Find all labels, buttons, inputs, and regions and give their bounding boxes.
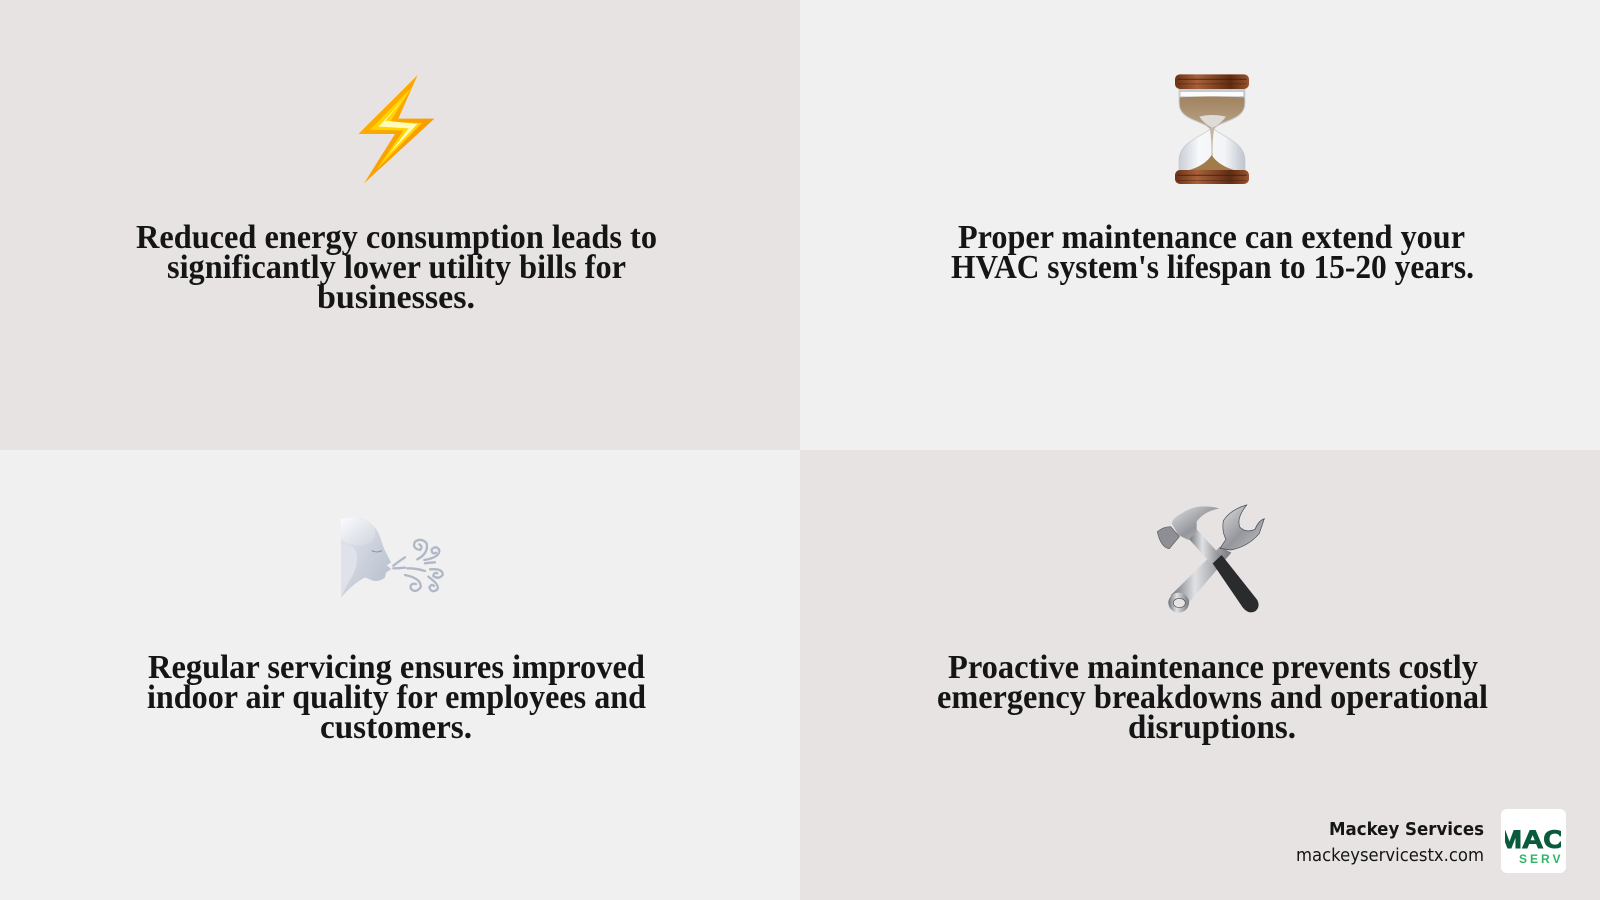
- icon: hourglass: [1175, 74, 1249, 184]
- logo: Mackey Services badge: [1501, 809, 1566, 873]
- heading: air quality text: Regular servicing ensures improved: [148, 649, 645, 686]
- heading: breakdown prevention text: emergency breakdowns and operational: [937, 679, 1488, 716]
- heading: energy savings text: businesses.: [317, 279, 475, 316]
- icon: lightning bolt: [358, 75, 434, 183]
- panel: energy savings: [0, 0, 800, 450]
- panel: breakdown prevention: [800, 450, 1600, 900]
- footer: brand name and website: Mackey Services: [1329, 820, 1484, 840]
- heading: air quality text: indoor air quality for employees and: [147, 679, 646, 716]
- heading: system lifespan text: HVAC system's lifespan to 15-20 years.: [951, 249, 1474, 286]
- panel: air quality: [0, 450, 800, 900]
- heading: air quality text: [147, 649, 646, 746]
- heading: air quality text: customers.: [320, 709, 472, 746]
- panel: system lifespan: [800, 0, 1600, 450]
- heading: energy savings text: Reduced energy consumption leads to: [136, 219, 657, 256]
- logo: Mackey Services badge: MAC: [1497, 826, 1565, 854]
- footer: brand name and website: mackeyservicestx.com: [1296, 846, 1484, 866]
- heading: breakdown prevention text: disruptions.: [1128, 709, 1296, 746]
- heading: breakdown prevention text: [937, 649, 1488, 746]
- footer: brand name and website: [1296, 820, 1484, 866]
- heading: energy savings text: [136, 219, 657, 316]
- heading: energy savings text: significantly lower utility bills for: [167, 249, 626, 286]
- heading: breakdown prevention text: Proactive maintenance prevents costly: [948, 649, 1478, 686]
- heading: system lifespan text: [951, 219, 1474, 286]
- icon: wind face: [341, 518, 443, 598]
- heading: system lifespan text: Proper maintenance can extend your: [958, 219, 1465, 256]
- icon: hammer and wrench: [1157, 505, 1264, 613]
